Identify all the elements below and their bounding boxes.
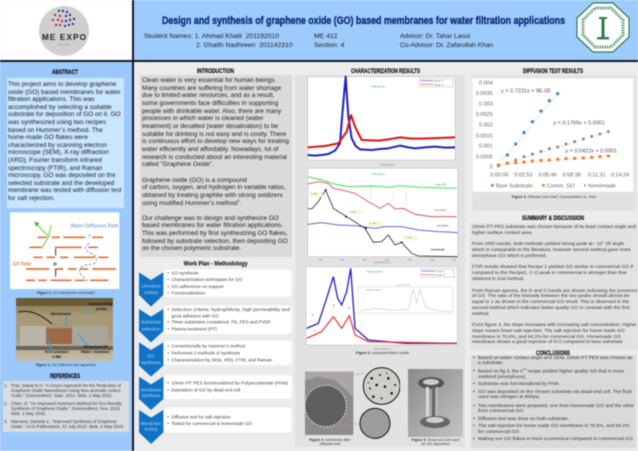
step: substrate selection: Selection criteria: hydrophilicity, high permeability and bbox=[171, 307, 291, 312]
text block: conclusions: from commercial GO. bbox=[478, 409, 524, 414]
step: membrane synthesis: • bbox=[167, 387, 169, 392]
text block: abstract: microscope (SEM), X-ray diffraction bbox=[8, 149, 109, 156]
panel: summary text: second method which indicates better quality GO in contrast with the first bbox=[472, 306, 630, 311]
step: GO synthesis: Characterization by SEM, XRD, FTIR, and Raman. bbox=[171, 357, 273, 362]
step: substrate selection bbox=[139, 306, 292, 342]
heading: introduction: INTRODUCTION bbox=[197, 68, 234, 75]
text block: introduction: some governments face difficulties in supporting bbox=[142, 100, 278, 107]
text block: references: 2. bbox=[4, 401, 8, 406]
step: substrate selection: Plasma treatment (PT) bbox=[171, 327, 217, 332]
text block: introduction: on the chosen polymeric substrate. bbox=[142, 245, 241, 252]
panel: logo area bbox=[0, 0, 132, 60]
text block: conclusions: The salt rejection for home made GO membrane is 75.6%, and 94.2% bbox=[478, 424, 629, 429]
text block: conclusions: oxidized (amorphous). bbox=[478, 375, 526, 380]
chart: FTIR spectra: 2nd method bbox=[434, 209, 447, 212]
text block: introduction: research is conducted about an interesting material bbox=[142, 154, 287, 161]
panel: summary text: From figure 4, the slope increases with increasing salt concentration. Higher bbox=[472, 323, 636, 328]
text block: conclusions: • bbox=[473, 390, 475, 394]
panel: summary text: which is comparable to the literature, however second method gave more bbox=[472, 248, 631, 253]
chart: diffusion concentration vs time: 0:05:46 bbox=[538, 173, 557, 179]
text block: references: 3. bbox=[4, 419, 8, 424]
text block: references: Synthesis of Graphene Oxide." Sciencedirect. Nov. 2013. bbox=[11, 406, 121, 411]
text block: abstract: for salt rejection. bbox=[8, 195, 55, 202]
icon: KFUPM seal bbox=[576, 2, 630, 54]
icon: ME EXPO logo bbox=[38, 6, 90, 56]
chart: diffusion concentration vs time: 0:08:38 bbox=[562, 173, 581, 179]
text block: introduction: suitable for drinking is not easy and is costly. There bbox=[142, 131, 286, 138]
panel: header banner bbox=[134, 0, 638, 60]
text block: references: Graphene Oxide Nanosheets Using Non-aromatic Amino bbox=[11, 388, 120, 393]
figure 2: GO diffusion test apparatus photo: Conductivity bbox=[88, 301, 113, 306]
heading: work plan: Work Plan - Methodology bbox=[184, 261, 248, 268]
chart: diffusion concentration vs time: 0:14:24 bbox=[611, 173, 629, 179]
chart: diffusion concentration vs time: 0 bbox=[490, 165, 493, 171]
text block: introduction: people with drinkable water. Also, there are many bbox=[142, 108, 281, 115]
text block: introduction: due to limited water resources, and as a result, bbox=[142, 92, 274, 99]
chart: FTIR spectra: 500 bbox=[452, 259, 457, 261]
step: literature review bbox=[139, 269, 292, 307]
divider lines bbox=[0, 60, 638, 62]
step: membrane synthesis: Deposition of GO by dead-end cell bbox=[171, 387, 240, 392]
step: literature review: Literature bbox=[141, 284, 161, 289]
chart: FTIR spectra: 1st method bbox=[437, 224, 449, 227]
panel: summary text: membrane is 75.6%, and 94.2% for commercial GO. Homemade GO bbox=[472, 335, 621, 340]
chart: FTIR spectra: Commercial bbox=[431, 250, 445, 252]
chart: diffusion concentration vs time: 0.0025 bbox=[476, 112, 493, 118]
step: literature review: • bbox=[167, 277, 169, 282]
chart: FTIR spectra: 3500 bbox=[318, 259, 324, 261]
step: membrane synthesis: 10min PT PES functionalized by Polyacrylamide (PAM) bbox=[171, 381, 289, 386]
chart: Raman spectra: Raman spectra bbox=[367, 270, 383, 273]
step: membrane testing: • bbox=[167, 414, 169, 419]
caption: figure 1: Figure 1. GO membrane schematic¹ bbox=[37, 291, 95, 295]
text block: abstract: membrane was tested with diffusion test bbox=[8, 187, 122, 194]
text block: conclusions: Two membranes were prepared, one from homemade GO and the other bbox=[478, 404, 634, 408]
text block: references: Chen, Ji. "An Improved Hummers Method for Eco-friendly bbox=[11, 401, 122, 406]
figure 2: GO diffusion test apparatus photo: 4.5M bbox=[52, 354, 62, 359]
text block: introduction: treatment) or desalted (water desalination) to be bbox=[142, 123, 278, 130]
text block: introduction: using modified Hummer’s method2. bbox=[142, 197, 241, 206]
panel: summary text: equal to 1 as shown in the commercial GO result. This is observed in the bbox=[472, 300, 629, 305]
caption: figure 5 bbox=[411, 438, 460, 446]
step: membrane synthesis: Membrane bbox=[141, 388, 162, 393]
step: substrate selection: • bbox=[167, 307, 169, 312]
course details bbox=[314, 32, 345, 48]
chart: FTIR spectra: X: 1640 bbox=[349, 211, 357, 213]
text block: abstract: oxide (GO) based membranes for water bbox=[8, 89, 121, 96]
chart: diffusion concentration vs time: y = 0.1765x + 0.0001 bbox=[553, 121, 605, 127]
heading: references: REFERENCES bbox=[50, 373, 80, 380]
text block: conclusions: Based on fig 3, the 2nd recipe yielded higher quality GO that is more bbox=[478, 366, 624, 374]
chart: XRD spectra: Recipe #1 bbox=[434, 81, 444, 83]
step: GO synthesis: GO bbox=[147, 353, 155, 358]
figure 1: GO membrane schematic: D bbox=[53, 262, 57, 267]
text block: introduction: water efficiently and affordably. Nowadays, lot of bbox=[142, 146, 278, 153]
figure 2: GO diffusion test apparatus photo: Membrane bbox=[51, 311, 72, 316]
text block: conclusions: for commercial GO bbox=[478, 430, 519, 435]
heading: diffusion test results: DIFFUSION TEST RESULTS bbox=[523, 68, 584, 75]
chart: diffusion concentration vs time: homemade bbox=[588, 183, 616, 189]
caption: figure 4: Diffusion test bbox=[320, 442, 340, 446]
step: literature review: Characterization techniques for GO bbox=[171, 277, 243, 282]
caption: figure 4 bbox=[308, 438, 351, 446]
chart: FTIR spectra: 1500 bbox=[408, 259, 413, 261]
text block: conclusions: Based on water contact angle and SEM, 10min PT PES was chosen as bbox=[478, 356, 632, 360]
chart: FTIR spectra: Glass KBr bbox=[436, 184, 446, 187]
chart: diffusion concentration vs time: y = 0.7231x + 9E-05 bbox=[501, 88, 551, 94]
heading: summary and discussion: SUMMARY & DISCUSSION bbox=[522, 215, 584, 222]
figure 2: GO diffusion test apparatus photo bbox=[15, 297, 114, 362]
step: GO synthesis bbox=[139, 341, 292, 377]
panel: characterization results background bbox=[295, 75, 465, 447]
chart: diffusion concentration vs time: Comm. GO bbox=[547, 183, 576, 189]
figure 2: GO diffusion test apparatus photo: KCl solution bbox=[45, 349, 69, 354]
step: membrane synthesis bbox=[139, 375, 292, 410]
student names: Student Names: 1. Ahmad Khalil 201192010 bbox=[144, 33, 279, 40]
figure 1: GO membrane schematic: GO flake bbox=[13, 262, 31, 268]
text block: conclusions bbox=[471, 355, 636, 448]
step: membrane testing: Tested for commercial & homemade GO bbox=[171, 421, 252, 426]
text block: introduction: Clean water is very essential for human beings. bbox=[142, 77, 276, 84]
step: membrane testing: testing bbox=[145, 427, 158, 432]
panel: left column background bbox=[0, 61, 132, 451]
caption: figure 4: Figure 4. membrane after bbox=[309, 438, 351, 442]
chart: XRD spectra: Recipe #2 bbox=[434, 84, 444, 86]
caption: figure 3: Figure 3. characterization results bbox=[356, 351, 409, 355]
text block: conclusions: • bbox=[473, 424, 475, 429]
figure 1: GO membrane schematic bbox=[10, 212, 120, 290]
panel: summary text: obtained in 2nd method. bbox=[472, 277, 524, 282]
heading: abstract: ABSTRACT bbox=[52, 69, 78, 76]
heading: conclusions: CONCLUSIONS bbox=[536, 350, 571, 357]
heading: characterization results: CHARACTERIZATION RESULTS bbox=[351, 68, 421, 75]
chart: diffusion concentration vs time: 0.0005 bbox=[476, 154, 493, 160]
caption: figure 6: Figure 6. Diffusion test chart: Concentration vs. Time bbox=[512, 195, 596, 199]
chart: Raman spectra: Recipe #1 bbox=[436, 271, 446, 273]
text block: abstract: was synthesized using two recipes bbox=[8, 119, 106, 126]
text block: abstract: microscopy. GO was deposited on the bbox=[8, 172, 116, 179]
text block: conclusions: • bbox=[473, 437, 475, 442]
text block: references: Oxide." ACS Publications. 22 July 2010. Web. 2 May 2016. bbox=[11, 424, 124, 429]
figure 2: GO diffusion test apparatus photo: Deionized DI bbox=[84, 344, 108, 349]
step: literature review: • bbox=[167, 291, 169, 296]
text block: introduction: of carbon, oxygen, and hydrogen in variable ratios, bbox=[142, 184, 286, 191]
chart: FTIR spectra: X: 1365 bbox=[369, 223, 377, 225]
step: membrane testing bbox=[139, 408, 292, 444]
chart: diffusion concentration vs time: Bare Substrate bbox=[496, 183, 533, 189]
chart: Raman spectra: Commercial GO bbox=[396, 285, 410, 287]
step: literature review: review bbox=[144, 290, 158, 295]
chart: Raman spectra: G bbox=[348, 308, 350, 310]
chart: diffusion concentration vs time: 0.001 bbox=[479, 144, 493, 150]
text block: abstract: home-made GO flakes were bbox=[8, 134, 88, 141]
text block: references: Acids." Sciencedirect. Sept. 2014. Web. 2 May 2016. bbox=[11, 393, 113, 398]
text block: introduction: This was performed by first synthesizing GO flakes, bbox=[142, 230, 288, 237]
advisors: Advisor: Dr. Tahar Laoui bbox=[400, 33, 470, 40]
text block: conclusions: Diffusion test was done on both substrate. bbox=[478, 417, 569, 422]
chart: diffusion concentration vs time bbox=[472, 78, 634, 192]
text block: introduction bbox=[140, 75, 292, 257]
chart: FTIR spectra: 3000 bbox=[340, 259, 345, 261]
step: substrate selection: • bbox=[167, 320, 169, 325]
chart: FTIR spectra: 2000 bbox=[385, 259, 390, 261]
chart: diffusion concentration vs time: y = 0.0422x + 0.0001 bbox=[565, 149, 617, 155]
step: membrane synthesis: • bbox=[167, 381, 169, 386]
chart: FTIR spectra bbox=[307, 168, 458, 264]
panel: diffusion test background bbox=[472, 75, 636, 211]
panel: summary text: amorphous GO which is preferred. bbox=[472, 254, 547, 259]
caption: figure 5: for GO deposition bbox=[421, 442, 450, 446]
step: GO synthesis: • bbox=[167, 350, 169, 355]
step: GO synthesis: Performed 2 methods of synthesis bbox=[171, 350, 241, 355]
text block: abstract: substrate for deposition of GO on it. GO bbox=[8, 111, 121, 118]
figure 4: membrane after diffusion test bbox=[304, 366, 401, 440]
step: literature review: • bbox=[167, 284, 169, 289]
advisors: Co-Advisor: Dr. Zafarullah Khan bbox=[400, 42, 493, 48]
panel: summary text: compared to the Recipe1. C-O peak in commercial is stronger than that bbox=[472, 271, 626, 276]
panel: summary text: From XRD results, both methods yielded strong peak at~ 10° 2θ angle bbox=[472, 242, 624, 247]
text block: introduction: based membranes for water filtration applications. bbox=[142, 222, 283, 229]
chart: diffusion concentration vs time: 0:11:31 bbox=[588, 173, 606, 179]
text block: conclusions: used was nitrogen at 900psi. bbox=[478, 395, 540, 400]
chart: diffusion concentration vs time: 0:00:00 bbox=[490, 173, 509, 179]
text block: introduction: obtained by treating graphite with strong oxidizers bbox=[142, 192, 283, 199]
student names: 2. Ghaith Nadhreen 201142310 bbox=[196, 42, 293, 48]
panel: summary text: membrane shows a good rejection of KCl compared to bare substrate bbox=[472, 340, 623, 345]
chart: Raman spectra: 2nd bbox=[313, 331, 316, 333]
advisors bbox=[400, 32, 494, 48]
text block: conclusions: Making our GO flakes is more economical compared to commercial GO. bbox=[478, 437, 634, 442]
icon: ME EXPO logo: KFUPM bbox=[58, 43, 70, 47]
step: GO synthesis: • bbox=[167, 357, 169, 362]
text block: introduction: is continuous effort to develop new ways for treating bbox=[142, 138, 289, 145]
text block: conclusions: Substrate was functionalized by PAM. bbox=[478, 382, 560, 387]
chart: diffusion concentration vs time: 0.003 bbox=[479, 102, 493, 108]
text block: conclusions: • bbox=[473, 382, 475, 387]
chart: diffusion concentration vs time: 0.0035 bbox=[476, 91, 493, 97]
text block: introduction: processes in which water is cleaned (water bbox=[142, 115, 263, 122]
step: literature review: • bbox=[167, 270, 169, 275]
text block: references: Web. 2 May 2016. bbox=[11, 411, 46, 416]
panel: summary text: FTIR results showed that Recipe 2 yielded GO similar to commercial GO if bbox=[472, 265, 633, 270]
step: membrane synthesis: Synthesis bbox=[142, 393, 160, 398]
figure 5: dead-end cell photo bbox=[408, 368, 464, 438]
step: substrate selection: Three substrates considered: PS, PES and PVDF bbox=[171, 320, 271, 325]
step: substrate selection: selection bbox=[142, 326, 161, 331]
step: GO synthesis: • bbox=[167, 344, 169, 349]
text block: conclusions: • bbox=[473, 417, 475, 422]
text block: abstract: accomplished by selecting a suitable bbox=[8, 104, 112, 111]
panel: summary text: slope means lower salt rejection. The salt rejection for home made GO bbox=[472, 329, 625, 334]
chart: diffusion concentration vs time: 0.004 bbox=[479, 80, 493, 86]
text block: abstract: (XRD), Fourier transform infrared bbox=[8, 157, 102, 164]
chart: FTIR spectra: FTIR spectra bbox=[372, 173, 386, 176]
text block: references: Tran, Diana N.H. "A Green Approach for the Reduction of bbox=[11, 383, 121, 388]
chart: FTIR spectra: 1000 bbox=[430, 259, 435, 261]
step: literature review: GO synthesis bbox=[171, 270, 199, 275]
chart: Raman spectra: D bbox=[333, 306, 335, 308]
figure 2: GO diffusion test apparatus photo: probe bbox=[96, 306, 108, 311]
text block: introduction: called "Graphene Oxide". bbox=[142, 161, 214, 168]
caption: figure 5: Figure 5. Dead-end Cell used bbox=[412, 438, 459, 442]
text block: references: Marcano, Daniela C. "Improved Synthesis of Graphene bbox=[11, 419, 117, 424]
text block: abstract: characterized by scanning electron bbox=[8, 142, 107, 149]
course details: ME 412 bbox=[314, 33, 337, 40]
text block: abstract: spectroscopy (FTIR), and Raman bbox=[8, 165, 102, 172]
chart: XRD spectra bbox=[306, 75, 456, 166]
step: membrane testing: Diffusion test for salt rejection bbox=[171, 414, 231, 419]
step: membrane testing: Membrane bbox=[141, 421, 162, 426]
text block: conclusions: GO was deposited on the chosen substrate via dead-end cell. The fluid bbox=[478, 390, 632, 394]
text block: introduction: followed by substrate selection, then depositing GO bbox=[142, 238, 288, 245]
chart: diffusion concentration vs time: 0:02:53 bbox=[514, 173, 533, 179]
step: substrate selection: • bbox=[167, 327, 169, 332]
text block: references bbox=[3, 381, 129, 432]
panel: summary text: higher surface contact area. bbox=[472, 231, 533, 236]
work plan methodology bbox=[138, 260, 292, 444]
chart: Raman spectra: Multilayer Graphene bbox=[367, 288, 382, 291]
panel: summary text: of GO. The ratio of the intensity between the two peaks should almost be bbox=[472, 294, 630, 299]
step: GO synthesis: Conventionally by Hummer’s method bbox=[171, 344, 246, 349]
caption: figure 2: Figure 2. GO Diffusion test apparatus bbox=[36, 363, 96, 367]
panel: summary text: From Raman spectra, the D and G bands are shown indicating the presence bbox=[472, 288, 637, 294]
step: GO synthesis: synthesis bbox=[141, 360, 161, 365]
chart: FTIR spectra: X: 3434 bbox=[310, 194, 318, 196]
student names bbox=[144, 32, 294, 48]
chart: diffusion concentration vs time: 0.002 bbox=[479, 123, 493, 129]
icon: ME EXPO logo: ME EXPO bbox=[42, 33, 87, 42]
panel: summary text: 10min PT PES substrate was chosen because of its least contact angle and bbox=[472, 225, 636, 230]
chart: Raman spectra: 1st bbox=[311, 314, 314, 317]
chart: diffusion concentration vs time: 0.0015 bbox=[476, 133, 493, 139]
chart: XRD spectra: XRD spectra bbox=[372, 85, 386, 88]
text block: abstract: based on Hummer’s method. The bbox=[8, 127, 103, 134]
text block: conclusions: • bbox=[473, 368, 475, 374]
text block: abstract bbox=[7, 78, 124, 208]
panel: summary text: method. bbox=[472, 312, 490, 317]
step: membrane testing: • bbox=[167, 421, 169, 426]
chart: FTIR spectra: 2500 bbox=[362, 259, 368, 261]
step: literature review: GO adherence on support bbox=[171, 284, 224, 289]
text block: abstract: selected substrate and the developed bbox=[8, 180, 114, 187]
figure 2: GO diffusion test apparatus photo: Water chamber bbox=[81, 349, 110, 354]
text block: conclusions: a substrate. bbox=[478, 361, 504, 366]
text block: abstract: filtration applications. This was bbox=[8, 96, 95, 103]
step: literature review: Functionalization bbox=[171, 291, 206, 296]
text block: introduction: Our challenge was to design and synthesize GO bbox=[142, 215, 279, 222]
text block: abstract: This project aims to develop graphene bbox=[8, 81, 116, 88]
step: substrate selection: Substrate bbox=[141, 319, 161, 324]
chart: Raman spectra bbox=[306, 266, 458, 350]
text block: references: 1. bbox=[4, 383, 8, 388]
figure 1: GO membrane schematic: Water Diffusion Path bbox=[71, 224, 118, 230]
chart: FTIR spectra: X: 1064 bbox=[405, 237, 412, 239]
text block: conclusions: • bbox=[473, 356, 475, 360]
chart: Raman spectra: Recipe #2 bbox=[436, 275, 446, 277]
text block: introduction: Many countries are suffering from water shortage bbox=[142, 85, 281, 92]
step: substrate selection: good adhesion with GO bbox=[171, 313, 219, 318]
panel: summary text bbox=[470, 223, 638, 350]
text block: conclusions: • bbox=[473, 404, 475, 408]
course details: Section: 4 bbox=[314, 42, 344, 48]
text block: introduction: Graphene oxide (GO) is a compound bbox=[142, 177, 247, 184]
